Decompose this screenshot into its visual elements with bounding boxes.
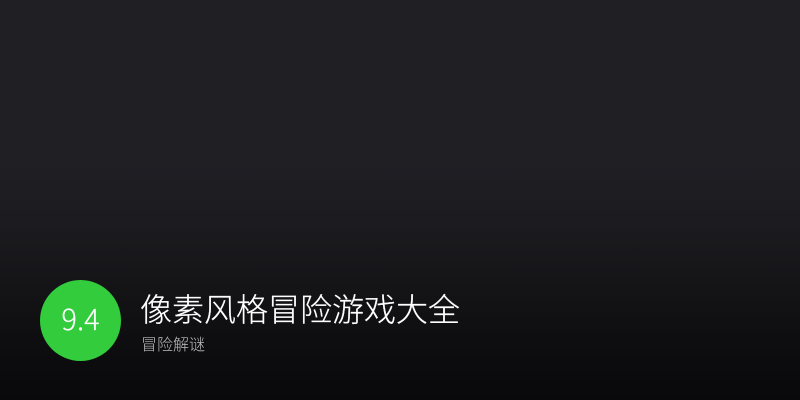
category subtitle: 冒险解谜 [141, 331, 205, 355]
score badge: 9.4 [61, 297, 100, 339]
score badge [40, 280, 121, 361]
title: 像素风格冒险游戏大全 [140, 285, 460, 331]
